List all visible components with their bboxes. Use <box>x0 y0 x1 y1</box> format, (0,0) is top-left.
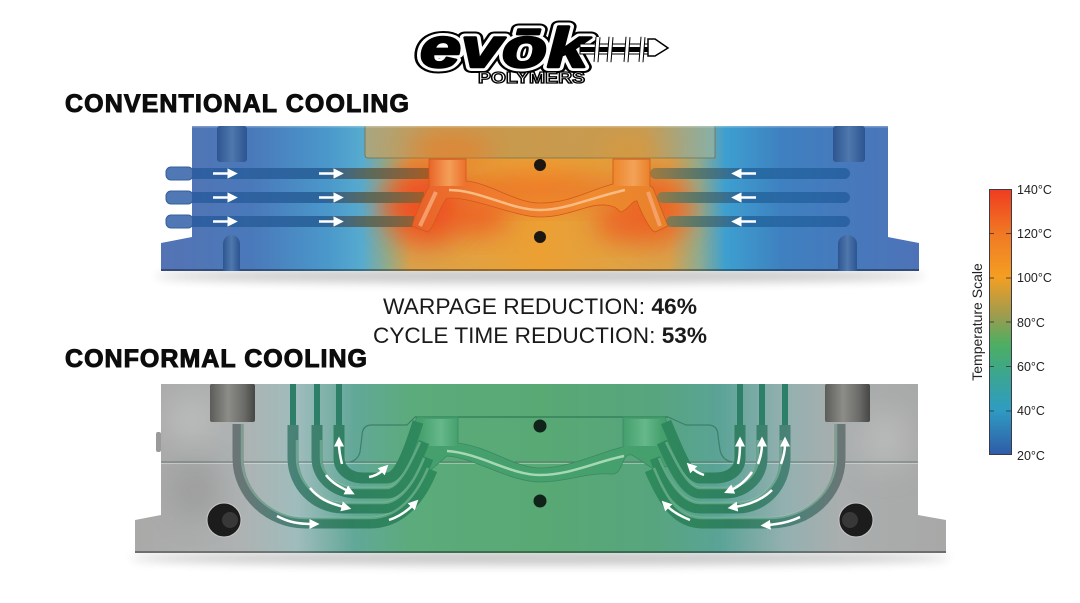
logo: Evok Polymers <box>420 16 668 87</box>
mold body with heat map <box>161 126 919 271</box>
ejector holes <box>534 159 546 171</box>
cooling channels: right <box>650 384 840 523</box>
scale labels: 60°C <box>1017 360 1045 374</box>
flow arrows: left <box>277 444 413 524</box>
ejector holes <box>534 420 546 432</box>
legend: temperature scale <box>969 183 1052 463</box>
flow arrows: right <box>739 174 756 222</box>
warpage reduction: WARPAGE REDUCTION: 46% <box>383 294 697 319</box>
logo: Evok Polymers: evōk <box>420 16 592 79</box>
scale labels: 40°C <box>1017 404 1045 418</box>
scale labels: 100°C <box>1017 271 1052 285</box>
scale labels: 140°C <box>1017 183 1052 197</box>
counterbore: bottom right <box>838 235 857 271</box>
flow arrows: right <box>667 444 800 525</box>
panel: conformal cooling mold <box>130 384 950 565</box>
counterbore: top right <box>833 126 865 162</box>
logo: Evok Polymers: evōk <box>420 16 592 79</box>
cavity outline <box>350 417 732 462</box>
panel: conventional cooling mold <box>155 126 925 283</box>
molded part <box>405 417 680 482</box>
logo: Evok Polymers: evōk <box>420 16 592 79</box>
mold shadow <box>130 551 950 565</box>
mold body with temperature map <box>135 384 946 553</box>
logo screw <box>580 37 668 62</box>
counterbore: top left <box>217 126 247 162</box>
cooling channels: left <box>238 384 432 523</box>
cooling channels: right <box>650 168 850 227</box>
counterbore: right <box>825 384 870 422</box>
flow arrows: left <box>213 174 336 222</box>
mold shadow <box>155 269 925 283</box>
molded part <box>412 159 668 232</box>
scale labels: 20°C <box>1017 449 1045 463</box>
scale labels: 80°C <box>1017 316 1045 330</box>
bolt holes <box>207 503 873 537</box>
cooling channels: left <box>192 168 430 227</box>
counterbore: bottom left <box>223 235 240 271</box>
results text <box>373 294 707 348</box>
counterbore: left <box>210 384 255 422</box>
heading: conventional cooling: CONVENTIONAL COOLING <box>65 90 409 118</box>
logo subtitle: POLYMERS <box>478 70 585 87</box>
cycle time reduction: CYCLE TIME REDUCTION: 53% <box>373 323 707 348</box>
scale labels <box>1017 183 1052 463</box>
color bar <box>990 190 1012 454</box>
scale labels: 120°C <box>1017 227 1052 241</box>
side fitting <box>156 432 161 452</box>
inlet fittings <box>166 167 193 228</box>
heading: conformal cooling: CONFORMAL COOLING <box>65 345 367 373</box>
legend title: Temperature Scale <box>969 263 985 381</box>
